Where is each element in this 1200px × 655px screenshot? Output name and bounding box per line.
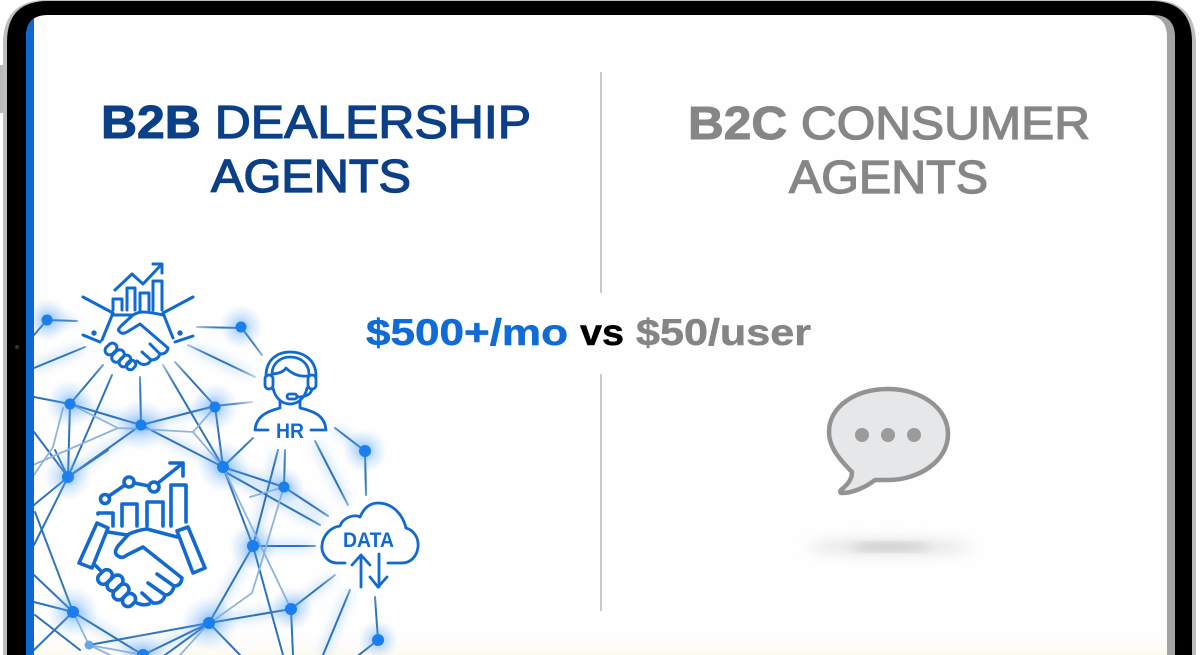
icon: data cloud: [318, 500, 422, 590]
side button: [0, 65, 3, 113]
network graph: [25, 298, 398, 655]
price comparison: vs: [580, 312, 624, 353]
icon: data cloud: DATA: [343, 529, 394, 552]
bubble shadow: [808, 540, 972, 554]
heading: B2C consumer agents: B2C CONSUMER: [688, 97, 1090, 149]
icon: large handshake with chart: [71, 461, 219, 613]
icon: handshake with rising chart: [80, 257, 204, 373]
camera dot: [15, 345, 19, 349]
price comparison: $500+/mo: [366, 312, 568, 353]
icon: HR headset agent: [242, 343, 338, 447]
heading: B2B dealership agents: B2B DEALERSHIP: [101, 96, 531, 148]
heading: B2C consumer agents: [688, 97, 1090, 203]
price comparison: [366, 312, 811, 353]
heading: B2C consumer agents: AGENTS: [789, 151, 988, 203]
heading: B2B dealership agents: [101, 96, 531, 202]
price comparison: $50/user: [636, 312, 811, 353]
icon: HR headset agent: HR: [276, 420, 304, 443]
icon: grey speech bubble: [829, 389, 948, 493]
blue left stripe: [26, 15, 34, 655]
center divider: [600, 72, 602, 611]
heading: B2B dealership agents: AGENTS: [211, 150, 411, 202]
